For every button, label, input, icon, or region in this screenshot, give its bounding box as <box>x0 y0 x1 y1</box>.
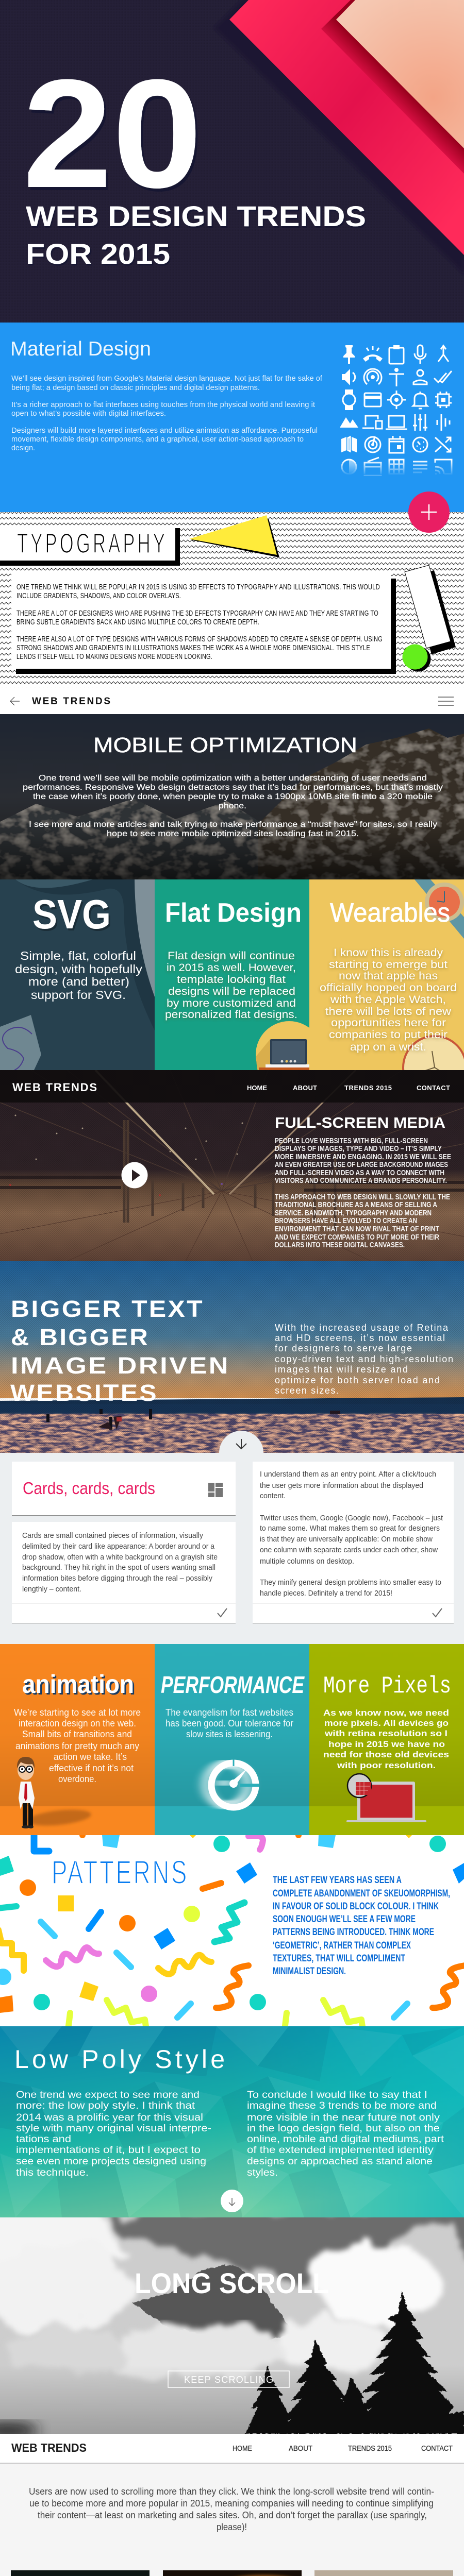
text: card left: Cards are small contained pieces of information, visually <box>22 1531 203 1540</box>
nav links <box>233 2444 453 2453</box>
decoration: polygons <box>0 2026 464 2217</box>
heading: cards: Cards, cards, cards <box>23 1479 155 1498</box>
photo: clouds and mountain <box>0 2200 464 2439</box>
image: orange clouds thumbnail <box>163 2570 302 2576</box>
text: low poly left: style with many original visual interpre- <box>16 2123 211 2134</box>
text: flat body: template looking flat <box>177 974 286 986</box>
text: card left: drop shadow, often with a white background on a grayish site <box>22 1553 218 1562</box>
illustration: watch <box>415 879 464 939</box>
panel: svg <box>0 879 155 1070</box>
shape: chevron inner shadow <box>321 0 464 174</box>
text: low poly right: more visible in the near future not only <box>247 2112 440 2123</box>
nav: white bar <box>0 2434 464 2463</box>
text: bigger body: and HD screens, it’s now essential <box>275 1333 445 1343</box>
text: mobile body: hope to see more mobile optimized sites loading fast in 2015. <box>107 829 359 838</box>
text: performance body: has been good. Our tolerance for <box>165 1718 293 1728</box>
heading: animation: animation <box>22 1670 134 1699</box>
heading: low poly style: Low Poly Style <box>14 2045 225 2074</box>
logo: web trends: WEB TRENDS <box>32 696 110 707</box>
heading: svg: SVG <box>32 891 111 937</box>
text: bigger body <box>275 1323 453 1396</box>
heading: long scroll: LONG SCROLL <box>135 2267 329 2299</box>
text: mobile body: phone. <box>219 802 246 810</box>
panel: more pixels <box>309 1644 464 1835</box>
text: wearables body: companies to put their <box>329 1029 448 1041</box>
nav links: CONTACT <box>421 2444 453 2453</box>
text: animation body: effective if not it’s not <box>49 1763 134 1773</box>
text: low poly right: imagine these 3 trends to be more and <box>247 2100 437 2111</box>
text: patterns body: SOON ENOUGH WE’LL SEE A FEW MORE <box>273 1914 416 1925</box>
text: long scroll body <box>29 2486 434 2532</box>
text box <box>11 573 396 674</box>
icon: check <box>218 1608 227 1617</box>
panel: bigger text <box>0 1261 464 1475</box>
text: card left: background. They hit right in the spot of users wanting small <box>22 1563 216 1572</box>
card: body left <box>12 1522 236 1623</box>
text: more pixels body: more pixels. All devices go <box>324 1718 449 1728</box>
icon: speed gauge <box>206 1759 259 1807</box>
photo: pine trees <box>245 2292 464 2434</box>
text: wearables body: now that apple has <box>339 970 438 982</box>
text: material body: movement, flexible design components, and a graphical, user action-based approach to <box>11 435 304 444</box>
logo: web trends: WEB TRENDS <box>11 2441 87 2454</box>
text: svg body: more (and better) <box>28 975 129 988</box>
panel: mobile optimization <box>0 714 464 879</box>
heading: bigger text: WEBSITES <box>10 1380 158 1406</box>
text: flat body: designs will be replaced <box>168 986 295 997</box>
text: card right: the user gets more information about the displayed <box>260 1481 423 1490</box>
nav links: ABOUT <box>289 2444 312 2453</box>
text: typography body <box>16 583 383 661</box>
text: card right: handle pieces. Definitely a trend for 2015! <box>260 1589 392 1598</box>
heading: full-screen media: FULL-SCREEN MEDIA <box>275 1115 445 1131</box>
text: material body: design. <box>11 444 35 452</box>
nav links: HOME <box>247 1084 267 1092</box>
text: material body <box>11 374 323 452</box>
text: material body: It’s a richer approach to flat interfaces using touches from the physical world and leaving it <box>11 400 316 409</box>
text: svg body: design, with hopefully <box>15 962 143 976</box>
text: bigger body: copy-driven text and high-resolution <box>275 1354 453 1364</box>
text: animation body <box>14 1707 141 1784</box>
text: low poly right <box>247 2090 444 2178</box>
text: performance body <box>165 1707 293 1739</box>
text: low poly left: One trend we expect to see more and <box>16 2090 200 2100</box>
icon: hamburger <box>438 697 454 705</box>
panel: animation <box>0 1644 155 1835</box>
text: animation body: We’re starting to see at lot more <box>14 1707 141 1718</box>
text: animation body: animations for pretty much any <box>15 1741 139 1751</box>
text: low poly right: styles. <box>247 2167 278 2178</box>
text: more pixels body: hope in 2015 we have no <box>328 1739 445 1749</box>
heading: bigger text: & BIGGER <box>11 1324 150 1350</box>
heading box <box>0 526 180 566</box>
text: low poly right: in the logo design field, but also on the <box>247 2123 440 2134</box>
nav links <box>247 1084 450 1092</box>
heading: patterns: PATTERNS <box>52 1854 189 1891</box>
text: low poly left: more: the low poly style. I think that <box>16 2100 195 2111</box>
text: animation body: Small bits of transitions and <box>22 1729 132 1739</box>
text: bigger body: With the increased usage of Retina <box>275 1323 449 1333</box>
icon: check <box>433 1608 442 1617</box>
panel: long scroll <box>0 2200 464 2439</box>
heading: typography: TYPOGRAPHY <box>17 528 168 559</box>
text: patterns body <box>273 1875 450 1977</box>
decoration: memphis shapes <box>0 1832 464 2030</box>
text: full-screen body: PEOPLE LOVE WEBSITES WITH BIG, FULL-SCREEN <box>275 1137 428 1145</box>
nav links: TRENDS 2015 <box>348 2444 392 2453</box>
text: mobile body: performances. Responsive Web design detractors say that it’s bad for performances, but that’s mostly <box>23 783 443 792</box>
icon: back arrow <box>10 697 20 705</box>
text: material body: being flat; a design based on classic principles and digital design patterns. <box>11 383 260 392</box>
text: material body: We’ll see design inspired from Google’s Material design language. Not just flat for the sake of <box>11 374 323 383</box>
shape: chevron shadow <box>214 0 464 274</box>
text: typography body: BRING SUBTLE GRADIENTS BACK AND USING MULTIPLE COLORS TO CREATE DEPTH. <box>16 618 259 626</box>
text: more pixels body: As we know now, we need <box>323 1708 449 1718</box>
text: flat body: Flat design will continue <box>168 950 295 962</box>
text: svg body: Simple, flat, colorful <box>20 949 136 962</box>
text: patterns body: THE LAST FEW YEARS HAS SEEN A <box>273 1875 402 1886</box>
text: performance body: The evangelism for fast websites <box>165 1707 293 1718</box>
logo: web trends: WEB TRENDS <box>12 1081 97 1094</box>
title: for 2015: FOR 2015 <box>26 238 170 270</box>
panel: material design <box>0 323 464 512</box>
shape: pink chevron <box>229 0 464 255</box>
text: flat body: personalized flat designs. <box>165 1009 297 1021</box>
photo: beach <box>0 1261 464 1453</box>
text: card left <box>22 1531 218 1594</box>
image: city thumbnail <box>314 2570 453 2576</box>
text: card right: Twitter uses them, Google (Google now), Facebook – just <box>260 1514 443 1522</box>
text: performance body: slow sites is lessening. <box>186 1729 273 1739</box>
nav links: HOME <box>233 2444 252 2453</box>
text: low poly left: this technique. <box>16 2167 89 2178</box>
panel: patterns <box>0 1832 464 2030</box>
text: low poly left: see even more projects designed using <box>16 2156 206 2167</box>
text: animation body: interaction design on the web. <box>19 1718 136 1728</box>
text: wearables body: app on a wrist. <box>350 1041 426 1053</box>
text: bigger body: for designers to serve large <box>275 1343 412 1353</box>
text: card left: lengthly – content. <box>22 1585 81 1594</box>
panel: performance <box>155 1644 309 1835</box>
text: card right: one column with separate cards under each other, show <box>260 1546 438 1554</box>
text: flat body: in 2015 as well. However, <box>167 962 296 974</box>
text: low poly right: designs or approached as stand alone <box>247 2156 433 2167</box>
heading: performance: PERFORMANCE <box>161 1671 305 1698</box>
text: wearables body: with the Apple Watch, <box>330 994 446 1006</box>
shape: peach corner <box>336 0 464 148</box>
text: wearables body <box>320 947 457 1053</box>
text: more pixels body <box>323 1708 449 1770</box>
heading: bigger text: IMAGE DRIVEN <box>11 1352 230 1379</box>
text: bigger body: images that will resize and <box>275 1364 408 1375</box>
text: material body: open to what’s possible with digital interfaces. <box>11 409 166 418</box>
text: low poly right: To conclude I would like to say that I <box>247 2090 427 2100</box>
text: flat body: by more customized and <box>167 997 296 1009</box>
heading: material design: Material Design <box>10 338 151 360</box>
text: mobile body: I see more and more articles and talk trying to make performance a “must have” for sites, so I really <box>29 820 437 829</box>
photo: sky <box>111 2210 464 2287</box>
nav links: ABOUT <box>293 1084 317 1092</box>
text: card left: information bites before digging through the real – possibly <box>22 1574 212 1583</box>
panel: wearables <box>309 879 464 1099</box>
panel: flat design <box>155 879 309 1070</box>
text: typography body: INCLUDE GRADIENTS, SHADOWS, AND COLOR OVERLAYS. <box>16 591 181 600</box>
nav links: TRENDS 2015 <box>344 1084 392 1092</box>
illustration: laptop on circle <box>256 1021 309 1070</box>
shape: yellow triangle <box>189 515 279 557</box>
heading: bigger text <box>10 1296 230 1406</box>
text: low poly left: 2014 was a prolific year for this visual <box>16 2112 203 2123</box>
image: dark clouds thumbnail <box>11 2570 150 2576</box>
text: full-screen body: DOLLARS INTO THESE DIGITAL CANVASES. <box>275 1241 405 1249</box>
text: wearables body: there will be lots of new <box>325 1006 452 1018</box>
card: body right <box>253 1462 454 1623</box>
text: card right: They minify general design problems into smaller easy to <box>260 1578 441 1587</box>
text: low poly right: of the extended implemented identity <box>247 2145 434 2156</box>
text: patterns body: ‘GEOMETRIC’, RATHER THAN COMPLEX <box>273 1940 411 1951</box>
icon: down arrow button <box>221 2190 243 2212</box>
button: keep scrolling <box>168 2371 289 2387</box>
text: card right: to name some. What makes them so great for designers <box>260 1524 440 1533</box>
icons: material icon grid <box>340 345 452 475</box>
photo: mountains <box>0 728 464 879</box>
text: wearables body: opportunities here for <box>331 1017 446 1029</box>
button: pink plus <box>408 492 450 533</box>
text: long scroll body: please)! <box>217 2522 247 2532</box>
text: svg body <box>15 949 143 1002</box>
panel: full-screen media <box>0 1070 464 1261</box>
text: low poly left: implementations of it, but I expect to <box>16 2145 201 2156</box>
photo: station <box>0 1070 464 1261</box>
text: more pixels body: need for those old devices <box>323 1750 449 1759</box>
text: more pixels body: with retina resolution so I <box>324 1728 448 1738</box>
text: card right: is that they are universally applicable: On mobile show <box>260 1535 433 1544</box>
text: animation body: action we take. It’s <box>54 1752 127 1762</box>
icon: down arrow semicircle <box>219 1431 263 1475</box>
text: low poly left <box>16 2090 211 2178</box>
text: animation body: overdone. <box>58 1774 96 1784</box>
text: patterns body: MINIMALIST DESIGN. <box>273 1966 346 1977</box>
button: keep scrolling: KEEP SCROLLING <box>184 2375 273 2385</box>
text: patterns body: TEXTURES, THAT WILL COMPLIMENT <box>273 1953 405 1964</box>
shape: exclamation mark <box>402 565 456 672</box>
panel: cards <box>0 1453 464 1644</box>
text: full-screen body: BROWSERS HAVE ALL EVOLVED TO CREATE AN <box>275 1216 417 1225</box>
text: material body: Designers will build more layered interfaces and utilize animation as affordance. Purposeful <box>11 426 318 435</box>
illustration: paper with curve <box>0 1015 41 1070</box>
icon: play button <box>122 1162 147 1188</box>
text: wearables body: starting to emerge but <box>329 959 448 971</box>
heading: flat design: Flat Design <box>165 898 302 928</box>
text: mobile body: One trend we’ll see will be mobile optimization with a better understanding of user needs and <box>39 774 427 783</box>
heading: mobile optimization: MOBILE OPTIMIZATION <box>93 733 357 757</box>
panel: typography <box>0 492 464 687</box>
text: typography body: LENDS ITSELF WELL TO MAKING DESIGNS MORE MODERN LOOKING. <box>16 652 212 661</box>
text: long scroll body: Users are now used to scrolling more than they click. We think the long-scroll website trend will contin- <box>29 2486 434 2497</box>
card: title <box>12 1462 236 1516</box>
text: bigger body: optimize for both server load and <box>275 1375 440 1385</box>
text: wearables body: officially hopped on board <box>320 982 457 994</box>
nav: dark bar <box>0 1070 464 1103</box>
icon: dashboard <box>208 1483 223 1497</box>
text: full-screen body <box>275 1137 451 1249</box>
text: card right: content. <box>260 1492 286 1500</box>
text: bigger body: screen sizes. <box>275 1385 339 1396</box>
text: card left: delimited by their card like appearance: A border around or a <box>22 1542 215 1551</box>
text: long scroll body: ue to become more and more popular in 2015, meaning companies will needing to continue simplifying <box>29 2498 434 2509</box>
title: 20: 20 <box>23 47 202 220</box>
text: mobile body: the case when it’s poorly done, when people try to make a 1900px 10MB site fit into a 320 mobile <box>33 792 433 801</box>
illustration: laptop with magnifier <box>346 1774 426 1822</box>
text: long scroll body: their content—at least on marketing and sales sites. Oh, and don’t forget the parallax (use sparingly, <box>38 2510 427 2520</box>
nav links: CONTACT <box>417 1084 450 1092</box>
text: card right: I understand them as an entry point. After a click/touch <box>260 1470 436 1479</box>
panel: low poly <box>0 2026 464 2217</box>
title: web design trends: WEB DESIGN TRENDS <box>26 200 366 232</box>
heading: bigger text: BIGGER TEXT <box>11 1296 204 1322</box>
text: card right <box>260 1470 443 1598</box>
text: svg body: support for SVG. <box>31 988 126 1002</box>
text: low poly right: online, mobile and digital mediums, part <box>247 2134 444 2145</box>
text: card right: multiple columns on desktop. <box>260 1557 354 1566</box>
heading: wearables: Wearables <box>330 898 450 928</box>
illustration: shirt <box>15 879 155 1030</box>
text: flat body <box>165 950 297 1021</box>
nav: mobile header <box>0 687 464 714</box>
text: more pixels body: with poor resolution. <box>337 1760 436 1770</box>
illustration: clock <box>403 1036 464 1099</box>
panel: hero <box>0 0 464 323</box>
panel: long scroll article <box>0 2434 464 2576</box>
text: low poly left: tations and <box>16 2134 71 2145</box>
illustration: cartoon man <box>17 1757 92 1828</box>
text: wearables body: I know this is already <box>334 947 443 959</box>
text: mobile body <box>23 774 443 838</box>
